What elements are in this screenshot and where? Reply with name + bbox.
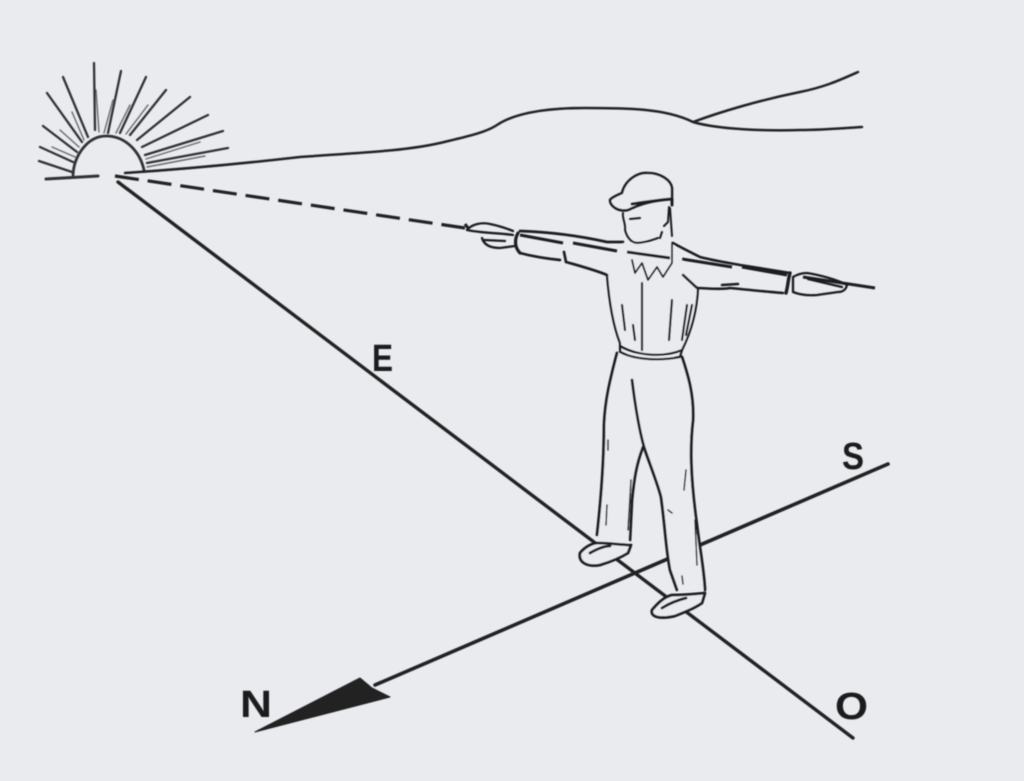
- label: O: O: [835, 686, 868, 728]
- face: [623, 207, 672, 243]
- legs and trousers: [597, 353, 705, 592]
- shirt torso: [607, 243, 698, 355]
- cap: [610, 173, 672, 210]
- left cuff: [516, 233, 520, 253]
- left hand: [467, 223, 515, 248]
- dashed sight line to the sun: [115, 176, 465, 228]
- cap band: [632, 199, 672, 205]
- right arm: [673, 243, 790, 293]
- right hand: [793, 273, 847, 295]
- collar: [632, 243, 672, 280]
- landscape horizon: [125, 72, 862, 173]
- right cuff: [786, 273, 790, 293]
- sight line across the arms: [465, 224, 875, 288]
- arrow head: north: [255, 678, 390, 732]
- label: S: S: [842, 436, 864, 478]
- person with outstretched arms: [465, 173, 875, 618]
- left arm: [520, 231, 623, 275]
- shirt outline and folds: [607, 275, 698, 350]
- left shoe: [580, 543, 631, 566]
- icon: rising sun: [39, 63, 228, 179]
- belt: [620, 343, 682, 359]
- label: E: E: [372, 338, 393, 380]
- label: N: N: [240, 684, 272, 726]
- right shoe: [652, 593, 705, 618]
- compass line: east-west: [118, 182, 853, 738]
- compass line: south-north: [375, 464, 888, 685]
